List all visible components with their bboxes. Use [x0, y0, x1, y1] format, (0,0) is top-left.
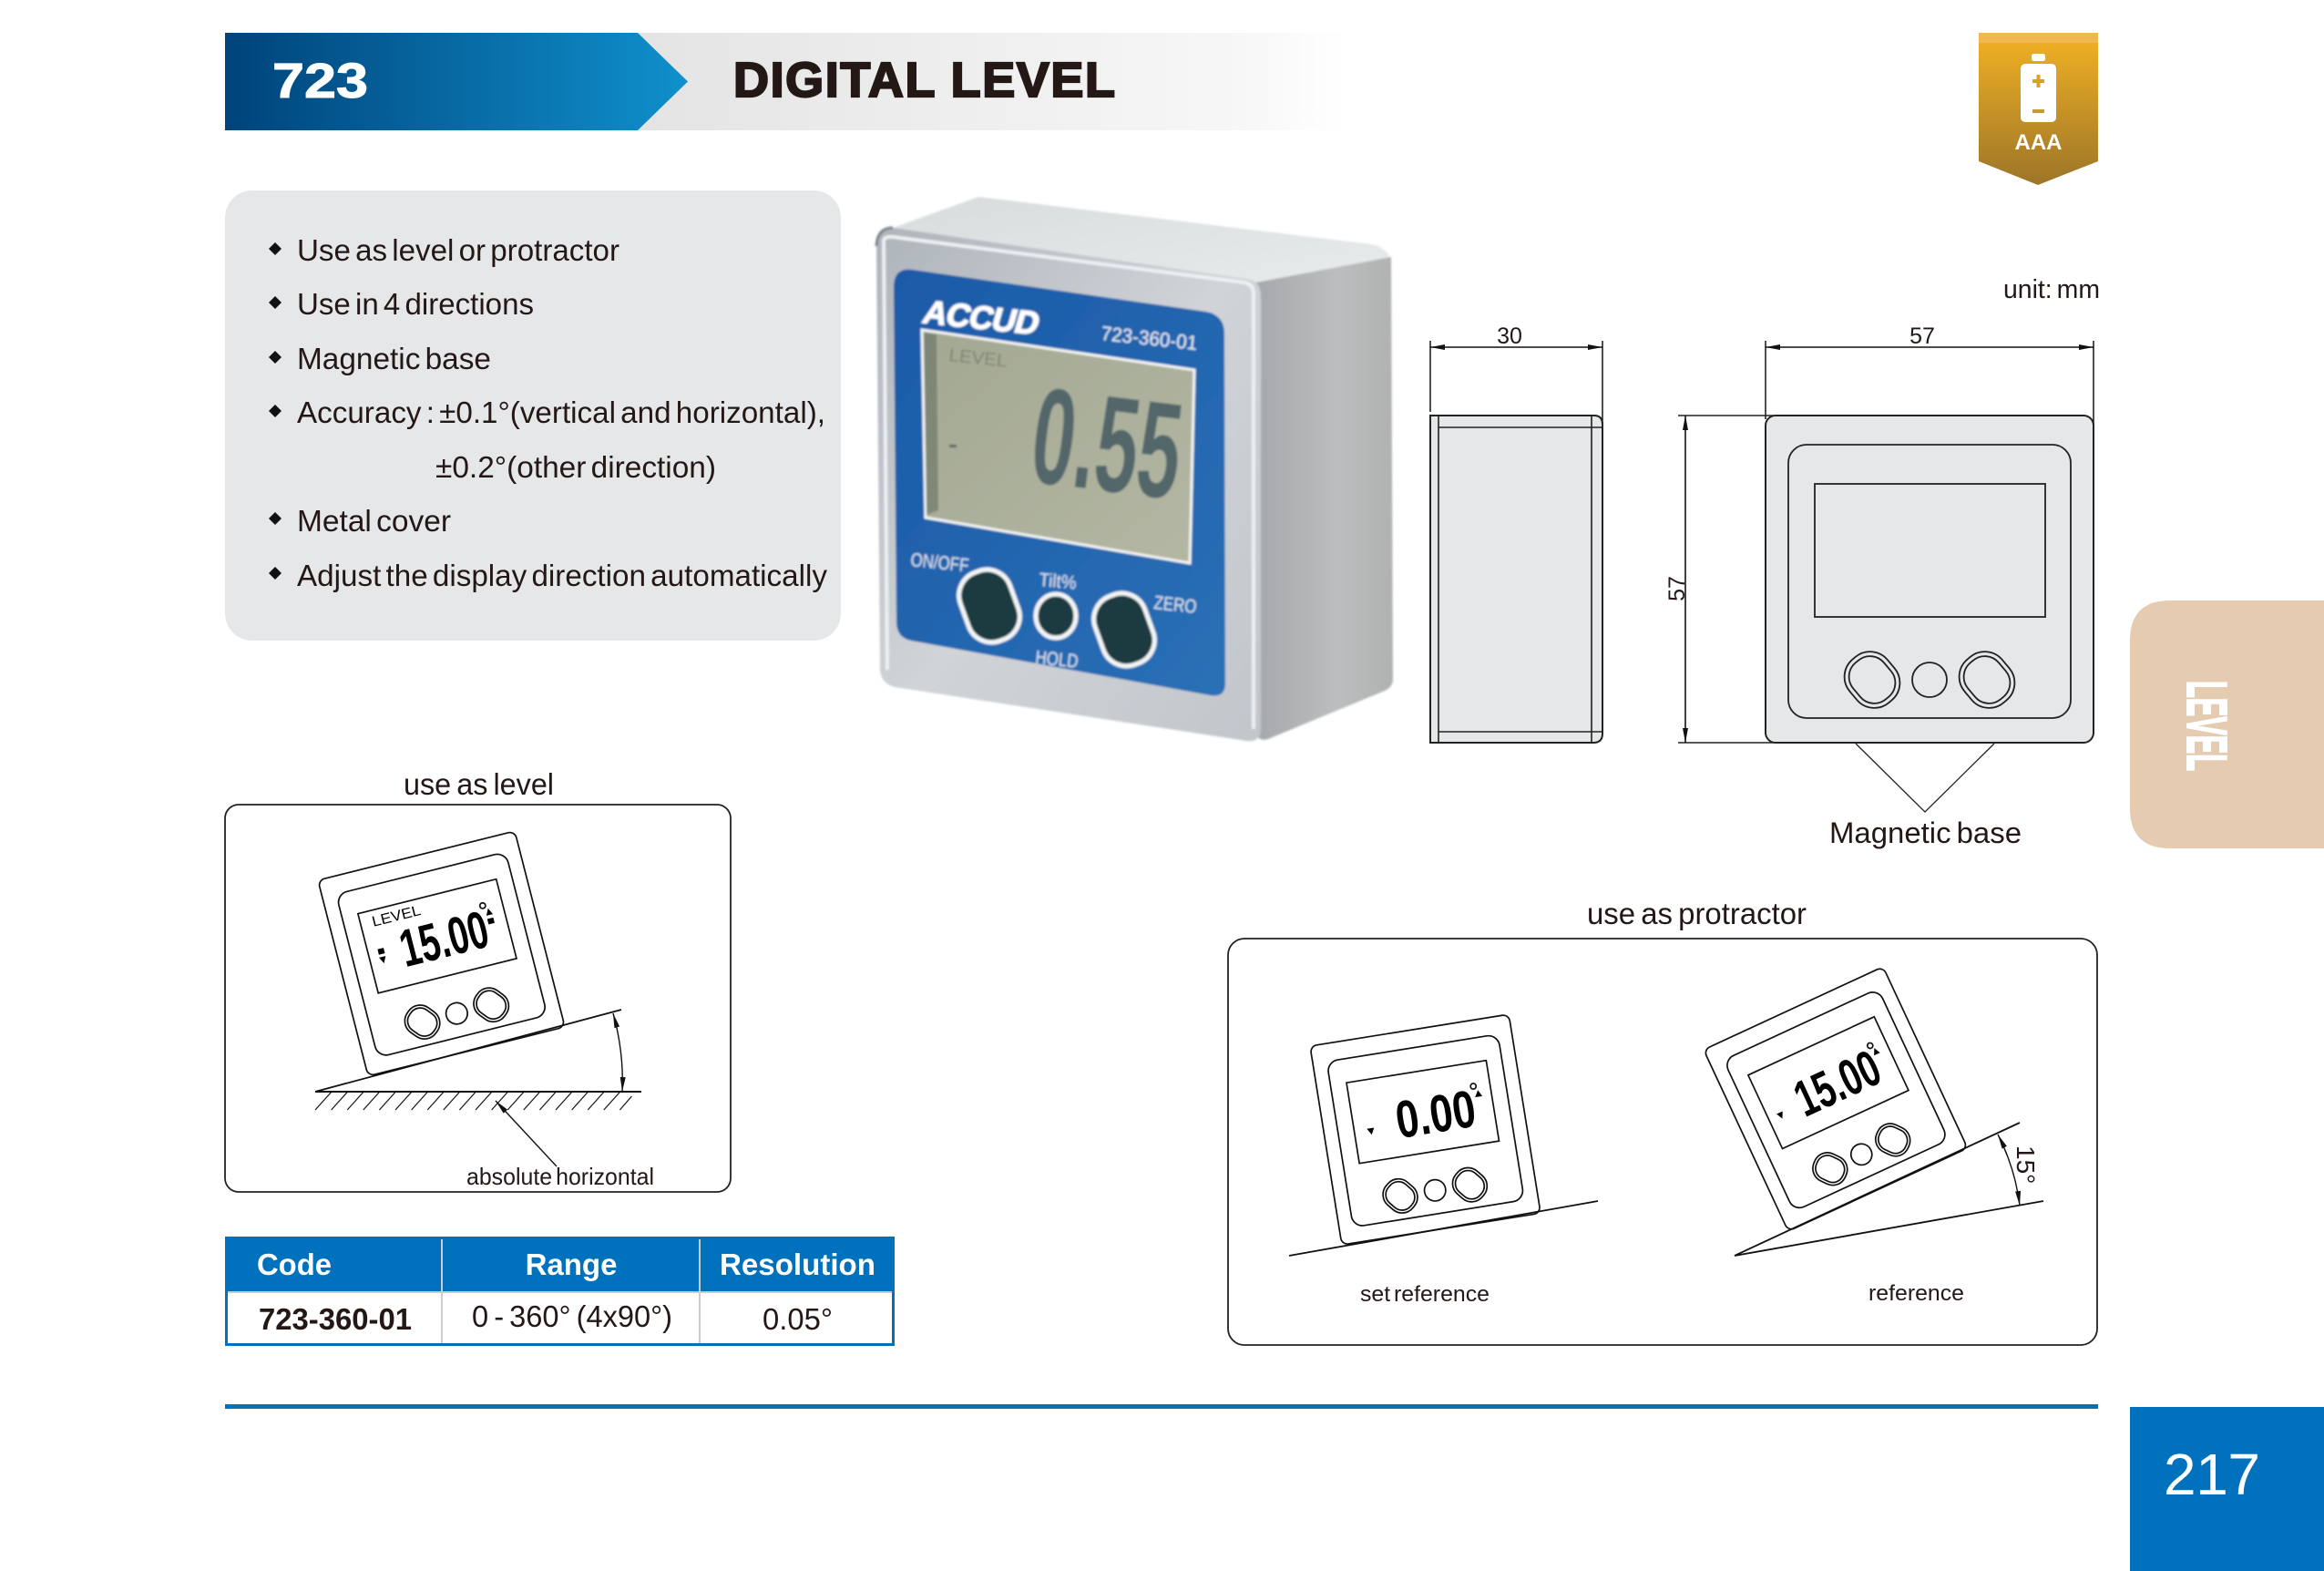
leader arrow	[496, 1101, 557, 1166]
heading: DIGITAL LEVEL	[733, 53, 1115, 108]
heading: use as protractor: use as protractor	[1587, 897, 1807, 930]
height dimension 57	[1664, 416, 1786, 743]
wedge lines	[1735, 1123, 2043, 1256]
control buttons	[952, 562, 1162, 673]
brand and model labels: ACCUD	[919, 293, 1044, 342]
footer rule	[225, 1404, 2098, 1409]
incline and ground	[315, 1010, 641, 1110]
button labels: ZERO	[1152, 592, 1198, 618]
unit note: unit: mm	[2003, 275, 2100, 304]
table header: Code	[257, 1248, 332, 1281]
table row: 0 - 360° (4x90°)	[472, 1299, 672, 1333]
table header: Resolution	[720, 1248, 875, 1281]
feature bullets	[269, 242, 282, 580]
feature text: Metal cover	[297, 504, 451, 538]
device: set reference 0.00	[1310, 1014, 1541, 1245]
product photo	[876, 197, 1393, 741]
surface line: set reference	[1289, 1201, 1598, 1256]
section number: 723	[272, 54, 368, 108]
table header	[257, 1248, 875, 1281]
magnetic base callout	[1829, 744, 2022, 849]
device: tilted 15.00 with LEVEL	[318, 831, 565, 1076]
device: measured 15.00: 15.00	[1785, 1038, 1889, 1127]
LCD screen	[922, 330, 1194, 563]
feature text: Accuracy : ±0.1°(vertical and horizontal),	[297, 395, 825, 429]
heading: use as level: use as level	[404, 767, 554, 801]
button labels: HOLD	[1034, 647, 1080, 673]
brand and model labels	[919, 293, 1199, 354]
device: set reference 0.00: 0.00	[1392, 1080, 1479, 1150]
button labels: ON/OFF	[909, 549, 970, 577]
side tab: LEVEL	[2130, 601, 2324, 848]
device: tilted 15.00 with LEVEL: 15.00	[394, 899, 495, 979]
feature text: Adjust the display direction automatically	[297, 559, 827, 592]
front view drawing	[1664, 323, 2094, 849]
button labels: Tilt%	[1039, 570, 1077, 594]
badge: AAA battery: AAA	[2015, 130, 2063, 155]
page number tab	[2130, 1407, 2324, 1571]
badge: AAA battery	[1979, 33, 2098, 185]
panel: features	[225, 190, 841, 641]
height dimension 57: 57	[1664, 576, 1690, 601]
label: set reference: set reference	[1360, 1282, 1490, 1307]
magnetic base callout: Magnetic base	[1829, 816, 2022, 849]
feature text	[297, 233, 827, 592]
width dimension 57: 57	[1909, 323, 1935, 349]
panel: use as protractor	[1228, 939, 2097, 1345]
width dimension 30	[1430, 323, 1602, 428]
button labels	[909, 549, 1198, 673]
LCD screen: 0.55	[1024, 358, 1190, 529]
angle arrow 15 degrees	[1998, 1135, 2020, 1206]
brand and model labels: 723-360-01	[1100, 322, 1199, 354]
side view drawing	[1430, 323, 1602, 743]
label: 15 degrees: 15°	[2012, 1145, 2040, 1184]
feature text: ±0.2°(other direction)	[435, 450, 716, 484]
table header: Range	[526, 1248, 617, 1281]
angle arrow	[613, 1013, 622, 1092]
side tab: LEVEL: LEVEL	[2175, 681, 2237, 771]
table row	[259, 1299, 833, 1336]
label: reference: reference	[1868, 1281, 1964, 1306]
panel: use as level	[225, 805, 731, 1192]
width dimension 57	[1766, 323, 2094, 428]
LCD screen: LEVEL	[947, 345, 1008, 372]
table row: 0.05°	[763, 1302, 833, 1336]
label: absolute horizontal: absolute horizontal	[466, 1163, 654, 1190]
feature text: Use as level or protractor	[297, 233, 619, 267]
specification table	[225, 1237, 895, 1345]
device: measured 15.00	[1704, 967, 1968, 1231]
page number tab: 217	[2164, 1442, 2260, 1507]
feature text: Use in 4 directions	[297, 287, 534, 321]
header banner	[225, 33, 1348, 130]
device: tilted 15.00 with LEVEL: LEVEL	[370, 902, 423, 930]
feature text: Magnetic base	[297, 342, 491, 375]
table row: 723-360-01	[259, 1302, 412, 1336]
width dimension 30: 30	[1497, 323, 1522, 349]
